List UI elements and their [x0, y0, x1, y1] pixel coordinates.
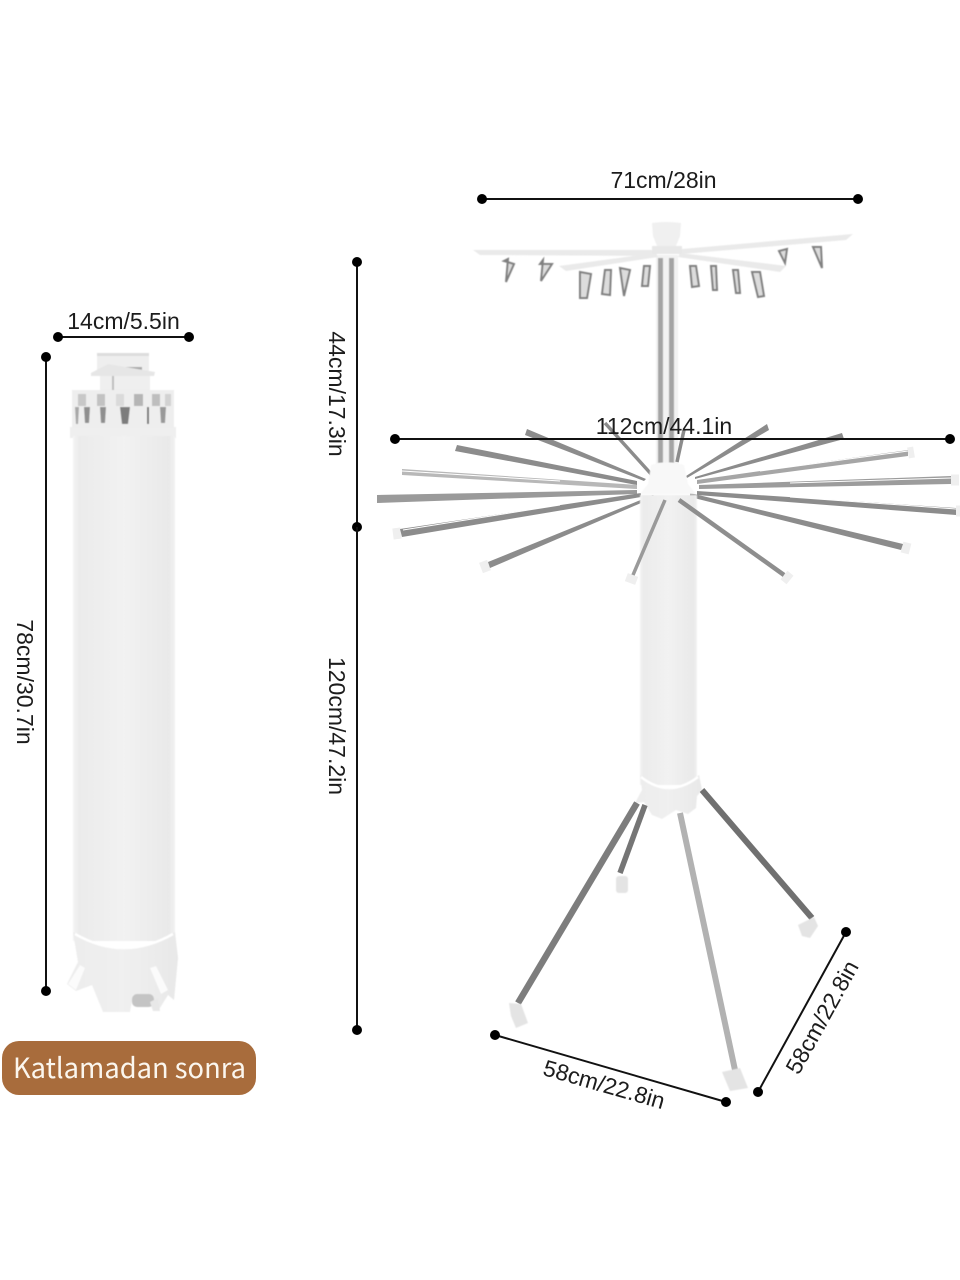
leg: front left — [518, 803, 637, 1003]
dimension: folded height 78cm: 78cm/30.7in — [12, 619, 38, 745]
collar rim — [641, 777, 698, 788]
folded rack crown with clips — [70, 390, 176, 438]
dimension: upper height 44cm — [324, 257, 362, 532]
leg: back left — [620, 805, 645, 873]
folded rack base collar with feet and wheel — [67, 932, 178, 1012]
open rack: main pole, hub and base — [635, 462, 702, 819]
spoke rod: front right — [679, 500, 784, 575]
dimension: base side 58cm — [753, 927, 864, 1097]
clothes pegs — [504, 247, 822, 298]
dimension: top arm width 71cm — [477, 167, 863, 204]
spoke rod: front left — [633, 500, 665, 575]
dimension: folded height 78cm — [12, 352, 51, 996]
dimension: folded width 14cm — [53, 308, 194, 342]
open rack: legs — [518, 790, 812, 1070]
open rack: lower spokes — [377, 423, 960, 583]
dimension: base front 58cm: 58cm/22.8in — [540, 1055, 668, 1114]
dimension: spoke span 112cm: 112cm/44.1in — [596, 413, 732, 439]
dimension: base front 58cm — [490, 1030, 731, 1114]
leg: back right — [702, 790, 812, 918]
top hanging arms — [473, 222, 853, 272]
badge: after folding — [2, 1041, 256, 1095]
badge: after folding: Katlamadan sonra — [13, 1047, 246, 1087]
dimension: lower height 120cm: 120cm/47.2in — [324, 657, 350, 795]
spoke rods — [377, 423, 956, 568]
base collar — [635, 775, 702, 819]
dimension: spoke span 112cm — [390, 413, 955, 444]
hub — [640, 462, 696, 494]
folded rack tube body — [73, 436, 175, 941]
leg wheels — [509, 876, 818, 1091]
main pole — [640, 495, 697, 785]
dimension: upper height 44cm: 44cm/17.3in — [324, 331, 350, 457]
open rack: upper pole, arms and clips — [473, 222, 853, 470]
dimension: top arm width 71cm: 71cm/28in — [610, 167, 717, 193]
folded rack: closed tube — [67, 353, 178, 1012]
leg: front centre — [680, 813, 735, 1070]
spoke caps — [393, 452, 960, 583]
folded rack top cap — [91, 353, 155, 394]
dimension: lower height 120cm — [324, 527, 362, 1035]
front spokes over pole — [633, 500, 784, 575]
dimension: folded width 14cm: 14cm/5.5in — [67, 308, 180, 334]
upper pole — [656, 255, 678, 470]
spoke highlights — [402, 451, 956, 530]
dimension: base side 58cm: 58cm/22.8in — [780, 956, 864, 1078]
